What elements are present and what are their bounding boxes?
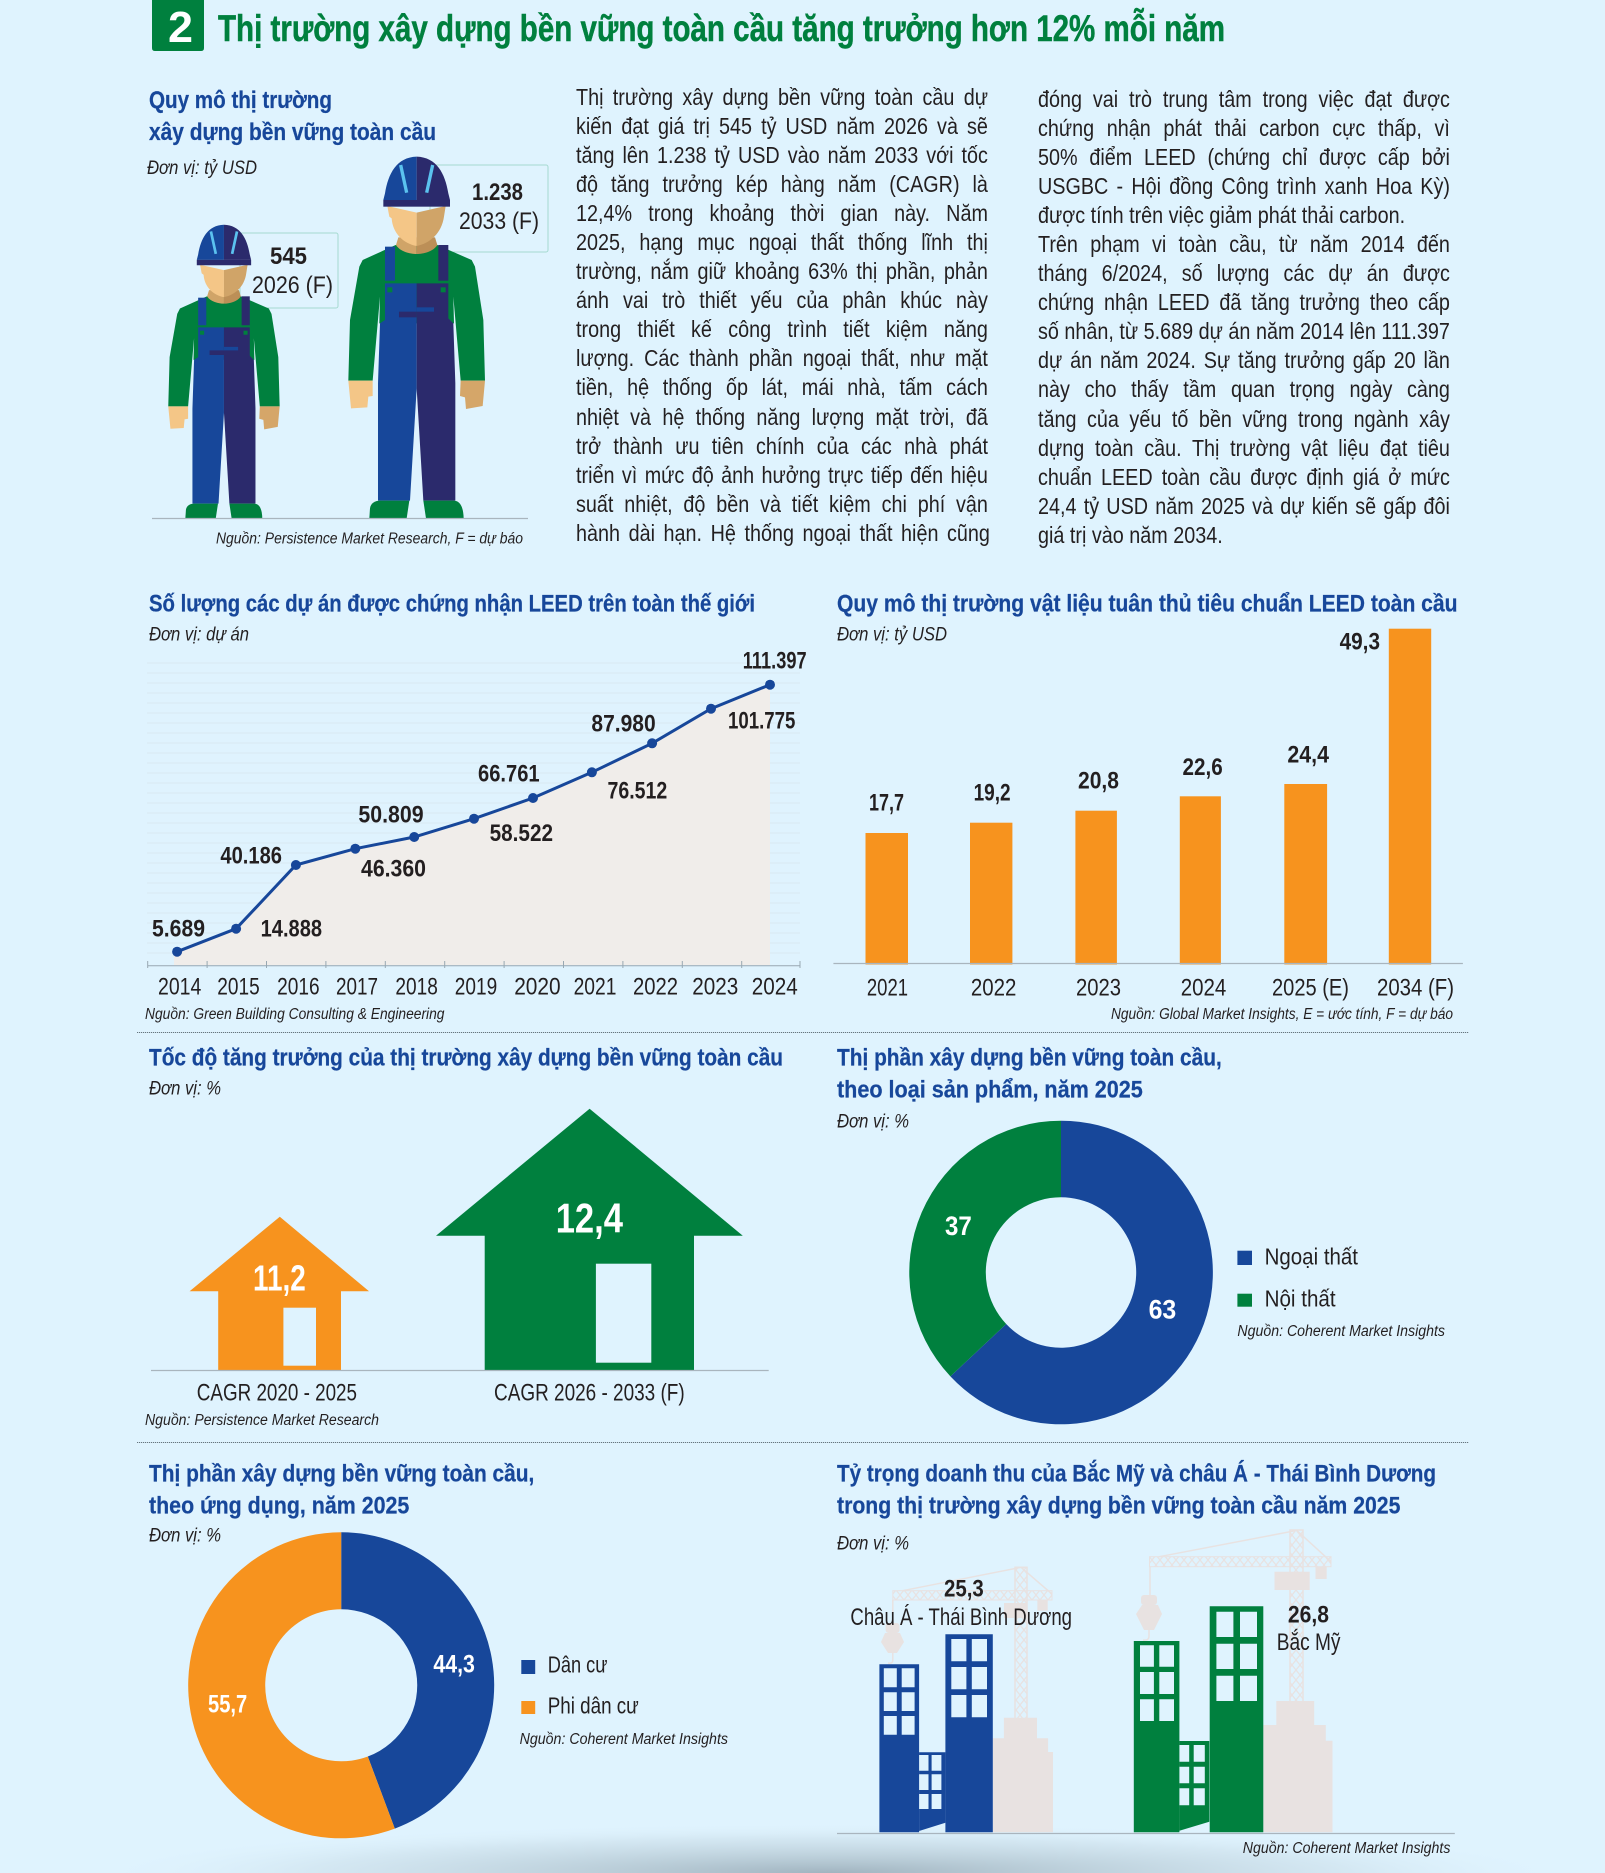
data labels: 24,4 xyxy=(1287,742,1330,769)
heading: trong thị trường xây dựng bền vững toàn cầu năm 2025 xyxy=(837,1492,1400,1519)
data labels: 22,6 xyxy=(1182,754,1223,781)
label: Asia-Pacific xyxy=(850,1576,1072,1631)
callout: 2033 xyxy=(430,165,548,252)
data labels: 50.809 xyxy=(358,801,424,828)
text block: column 2: tháng 6/2024, số lượng các dự án được xyxy=(1038,260,1450,286)
bar chart xyxy=(866,629,1431,964)
text block: column 1: tăng lên 1.238 tỷ USD vào năm 2033 với tốc xyxy=(576,142,988,168)
text block: column 1: trường, nắm giữ khoảng 63% thị phần, phản xyxy=(576,258,988,284)
text block: column 1: triển vì mức độ ảnh hưởng trực tiếp đến hiệu xyxy=(576,462,988,488)
legend: Dân cư xyxy=(548,1651,608,1677)
year labels: 2021 xyxy=(574,974,616,1001)
heading: market size xyxy=(149,87,436,146)
text block: column 2: 50% điểm LEED (chứng chỉ được cấp bởi xyxy=(1038,144,1450,170)
icon: blue buildings xyxy=(879,1634,993,1832)
section number badge xyxy=(152,0,204,52)
source: Nguồn: Coherent Market Insights xyxy=(520,1731,728,1748)
label: North America xyxy=(1277,1602,1340,1656)
text block: column 2: chứng nhận phát thải carbon cực thấp, vì xyxy=(1038,115,1450,141)
text block: column 2: giá trị vào năm 2034. xyxy=(1038,522,1223,548)
icon: orange house xyxy=(190,1217,369,1370)
text block: column 2: đóng vai trò trung tâm trong việc đạt được xyxy=(1038,86,1450,112)
section number badge: 2 xyxy=(168,3,193,52)
house labels: CAGR 2026 - 2033 (F) xyxy=(494,1380,685,1407)
text block: column 2: này cho thấy tầm quan trọng ngày càng xyxy=(1038,376,1450,402)
heading: market size: xây dựng bền vững toàn cầu xyxy=(149,119,436,146)
legend: Nội thất xyxy=(1265,1286,1336,1312)
data labels: 87.980 xyxy=(591,711,656,738)
icon: green house: 12,4 xyxy=(556,1195,624,1242)
data labels: 66.761 xyxy=(478,761,540,788)
year labels: 2034 (F) xyxy=(1377,975,1454,1002)
panel: regional revenue share buildings xyxy=(837,1460,1455,1857)
text block: column 1 xyxy=(576,84,990,546)
unit: Đơn vị: % xyxy=(837,1111,909,1132)
data labels: 14.888 xyxy=(261,916,322,943)
heading xyxy=(149,1461,534,1519)
data labels: 19,2 xyxy=(974,780,1011,807)
heading: theo loại sản phẩm, năm 2025 xyxy=(837,1077,1143,1104)
text block: column 1: lượng. Các thành phần ngoại thất, như mặt xyxy=(576,345,988,371)
donut chart xyxy=(909,1121,1213,1424)
icon: small worker xyxy=(168,225,280,518)
unit: Đơn vị: % xyxy=(149,1526,221,1547)
icon: green house xyxy=(436,1109,743,1370)
text block: column 2: số nhân, từ 5.689 dự án năm 2014 lên 111.397 xyxy=(1038,318,1450,344)
year labels: 2018 xyxy=(395,974,438,1001)
text block: column 1: ánh vai trò thiết yếu của phân khúc này xyxy=(576,287,988,313)
data labels: 76.512 xyxy=(608,777,667,804)
text block: column 1: suất nhiệt, độ bền và tiết kiệm chi phí vận xyxy=(576,491,988,517)
source: Nguồn: Global Market Insights, E = ước tính, F = dự báo xyxy=(1111,1006,1453,1023)
data labels xyxy=(869,628,1380,817)
text block: column 2 xyxy=(1038,86,1450,548)
year labels: 2023 xyxy=(1076,975,1121,1002)
text block: column 1: trong thiết kế công trình tiết kiệm năng xyxy=(576,316,988,342)
unit: Đơn vị: % xyxy=(149,1078,221,1099)
text block: column 1: độ tăng trưởng kép hàng năm (CAGR) là xyxy=(576,171,988,197)
text block: column 1: nhiệt và hệ thống năng lượng mặt trời, đã xyxy=(576,404,988,430)
data labels: 17,7 xyxy=(869,790,904,817)
heading: Số lượng các dự án được chứng nhận LEED trên toàn thế giới xyxy=(149,591,755,618)
house labels: CAGR 2020 - 2025 xyxy=(197,1380,357,1407)
line chart: area xyxy=(174,685,770,965)
callout: 2026: 545 xyxy=(270,243,307,270)
year labels: 2019 xyxy=(455,974,497,1001)
year labels xyxy=(158,974,798,1001)
bottom shadow xyxy=(90,1823,1570,1873)
source: Nguồn: Persistence Market Research, F = dự báo xyxy=(216,530,523,548)
heading: Quy mô thị trường vật liệu tuân thủ tiêu chuẩn LEED toàn cầu xyxy=(837,591,1458,618)
text block: column 2: dựng toàn cầu. Thị trường vật liệu đạt tiêu xyxy=(1038,435,1450,461)
data labels: 58.522 xyxy=(490,820,553,847)
text block: column 2: Trên phạm vi toàn cầu, từ năm 2014 đến xyxy=(1038,231,1450,257)
house labels xyxy=(197,1380,685,1407)
x axis xyxy=(148,961,800,968)
text block: column 2: 24,4 tỷ USD năm 2025 và dự kiến sẽ gấp đôi xyxy=(1038,493,1450,519)
heading: theo ứng dụng, năm 2025 xyxy=(149,1492,409,1519)
heading: Tốc độ tăng trưởng của thị trường xây dựng bền vững toàn cầu xyxy=(149,1045,783,1072)
line chart: series xyxy=(172,680,775,957)
year labels: 2025 (E) xyxy=(1272,975,1349,1002)
text block: column 1: 2025, hạng mục ngoại thất thống lĩnh thị xyxy=(576,229,988,255)
data labels: 49,3 xyxy=(1340,628,1380,655)
title: Thị trường xây dựng bền vững toàn cầu tăng trưởng hơn 12% mỗi năm xyxy=(218,8,1225,49)
unit: Đơn vị: dự án xyxy=(149,625,249,646)
label: Asia-Pacific: Châu Á - Thái Bình Dương xyxy=(850,1604,1072,1631)
heading xyxy=(837,1045,1222,1104)
callout: 2033: 1.238 xyxy=(472,179,523,206)
data labels: 20,8 xyxy=(1078,767,1119,794)
callout: 2033: 2033 (F) xyxy=(459,208,539,235)
text block: column 1: 12,4% trong khoảng thời gian này. Năm xyxy=(576,200,988,226)
data labels xyxy=(152,647,807,943)
source: Nguồn: Persistence Market Research xyxy=(145,1412,379,1429)
text block: column 1: tiền, hệ thống ốp lát, mái nhà, tấm cách xyxy=(576,374,988,400)
year labels: 2024 xyxy=(752,974,798,1001)
source: Nguồn: Coherent Market Insights xyxy=(1243,1840,1451,1857)
icon: crane and grey building, Asia-Pacific xyxy=(881,1567,1053,1832)
text block: column 1: trở thành ưu tiên chính của các nhà phát xyxy=(576,433,988,459)
heading xyxy=(837,1460,1436,1519)
label: North America: 26,8 xyxy=(1288,1602,1329,1629)
data labels: 111.397 xyxy=(743,647,807,674)
year labels: 2020 xyxy=(514,974,561,1001)
year labels: 2022 xyxy=(971,975,1016,1002)
year labels: 2017 xyxy=(336,974,378,1001)
callout: 2026: 2026 (F) xyxy=(252,272,333,299)
year labels: 2022 xyxy=(633,974,678,1001)
data labels: 40.186 xyxy=(220,842,282,869)
heading: market size: Quy mô thị trường xyxy=(149,87,332,114)
panel: growth rate houses xyxy=(145,1045,783,1429)
label: North America: Bắc Mỹ xyxy=(1277,1629,1340,1656)
year labels: 2023 xyxy=(692,974,738,1001)
source: Nguồn: Coherent Market Insights xyxy=(1237,1323,1445,1340)
donut chart: 55,7 xyxy=(208,1690,247,1718)
panel: LEED materials bar chart xyxy=(833,591,1463,1023)
legend xyxy=(521,1651,639,1718)
text block: column 1: kiến đạt giá trị 545 tỷ USD năm 2026 và sẽ xyxy=(576,113,988,139)
donut chart: 44,3 xyxy=(433,1650,475,1678)
heading: Thị phần xây dựng bền vững toàn cầu, xyxy=(837,1045,1222,1072)
legend: Phi dân cư xyxy=(548,1692,639,1718)
source: Nguồn: Green Building Consulting & Engineering xyxy=(145,1006,445,1023)
text block: column 2: chuẩn LEED toàn cầu được định giá ở mức xyxy=(1038,464,1450,490)
text block: column 1: hành dài hạn. Hệ thống ngoại thất hiện cũng xyxy=(576,520,990,546)
heading: Thị phần xây dựng bền vững toàn cầu, xyxy=(149,1461,534,1488)
unit: Đơn vị: tỷ USD xyxy=(147,158,257,179)
legend: Ngoại thất xyxy=(1265,1243,1359,1269)
year labels xyxy=(867,975,1454,1002)
year labels: 2016 xyxy=(277,974,320,1001)
donut chart: 37 xyxy=(945,1211,972,1241)
panel: share by application donut xyxy=(149,1461,728,1838)
text block: column 1: Thị trường xây dựng bền vững toàn cầu dự xyxy=(576,84,988,110)
unit: Đơn vị: % xyxy=(837,1533,909,1554)
label: Asia-Pacific: 25,3 xyxy=(944,1576,984,1603)
data labels: 46.360 xyxy=(361,856,426,883)
year labels: 2024 xyxy=(1181,975,1226,1002)
unit: Đơn vị: tỷ USD xyxy=(837,625,947,646)
icon: crane and grey building, North America xyxy=(1136,1530,1332,1832)
year labels: 2021 xyxy=(867,975,908,1002)
icon: orange house: 11,2 xyxy=(253,1258,306,1299)
icon: large worker xyxy=(348,157,485,518)
year labels: 2015 xyxy=(217,974,260,1001)
panel: market size workers xyxy=(147,87,548,548)
callout: 2026 xyxy=(240,233,338,308)
text block: column 2: được tính trên việc giảm phát thải carbon. xyxy=(1038,202,1405,228)
data labels: 5.689 xyxy=(152,916,205,943)
panel: share by product donut xyxy=(837,1045,1445,1424)
text block: column 2: tăng của yếu tố bền vững trong ngành xây xyxy=(1038,406,1450,432)
data labels: 101.775 xyxy=(728,707,795,734)
donut chart xyxy=(188,1532,494,1838)
text block: column 2: chứng nhận LEED đã tăng trưởng theo cấp xyxy=(1038,289,1450,315)
text block: column 2: USGBC - Hội đồng Công trình xanh Hoa Kỳ) xyxy=(1038,173,1450,199)
year labels: 2014 xyxy=(158,974,201,1001)
donut chart: 63 xyxy=(1149,1294,1176,1324)
legend xyxy=(1237,1243,1359,1312)
icon: green buildings xyxy=(1134,1606,1263,1832)
panel: LEED projects line chart xyxy=(145,591,807,1023)
heading: Tỷ trọng doanh thu của Bắc Mỹ và châu Á - Thái Bình Dương xyxy=(837,1460,1436,1488)
text block: column 2: dự án năm 2024. Sự tăng trưởng gấp 20 lần xyxy=(1038,347,1450,373)
